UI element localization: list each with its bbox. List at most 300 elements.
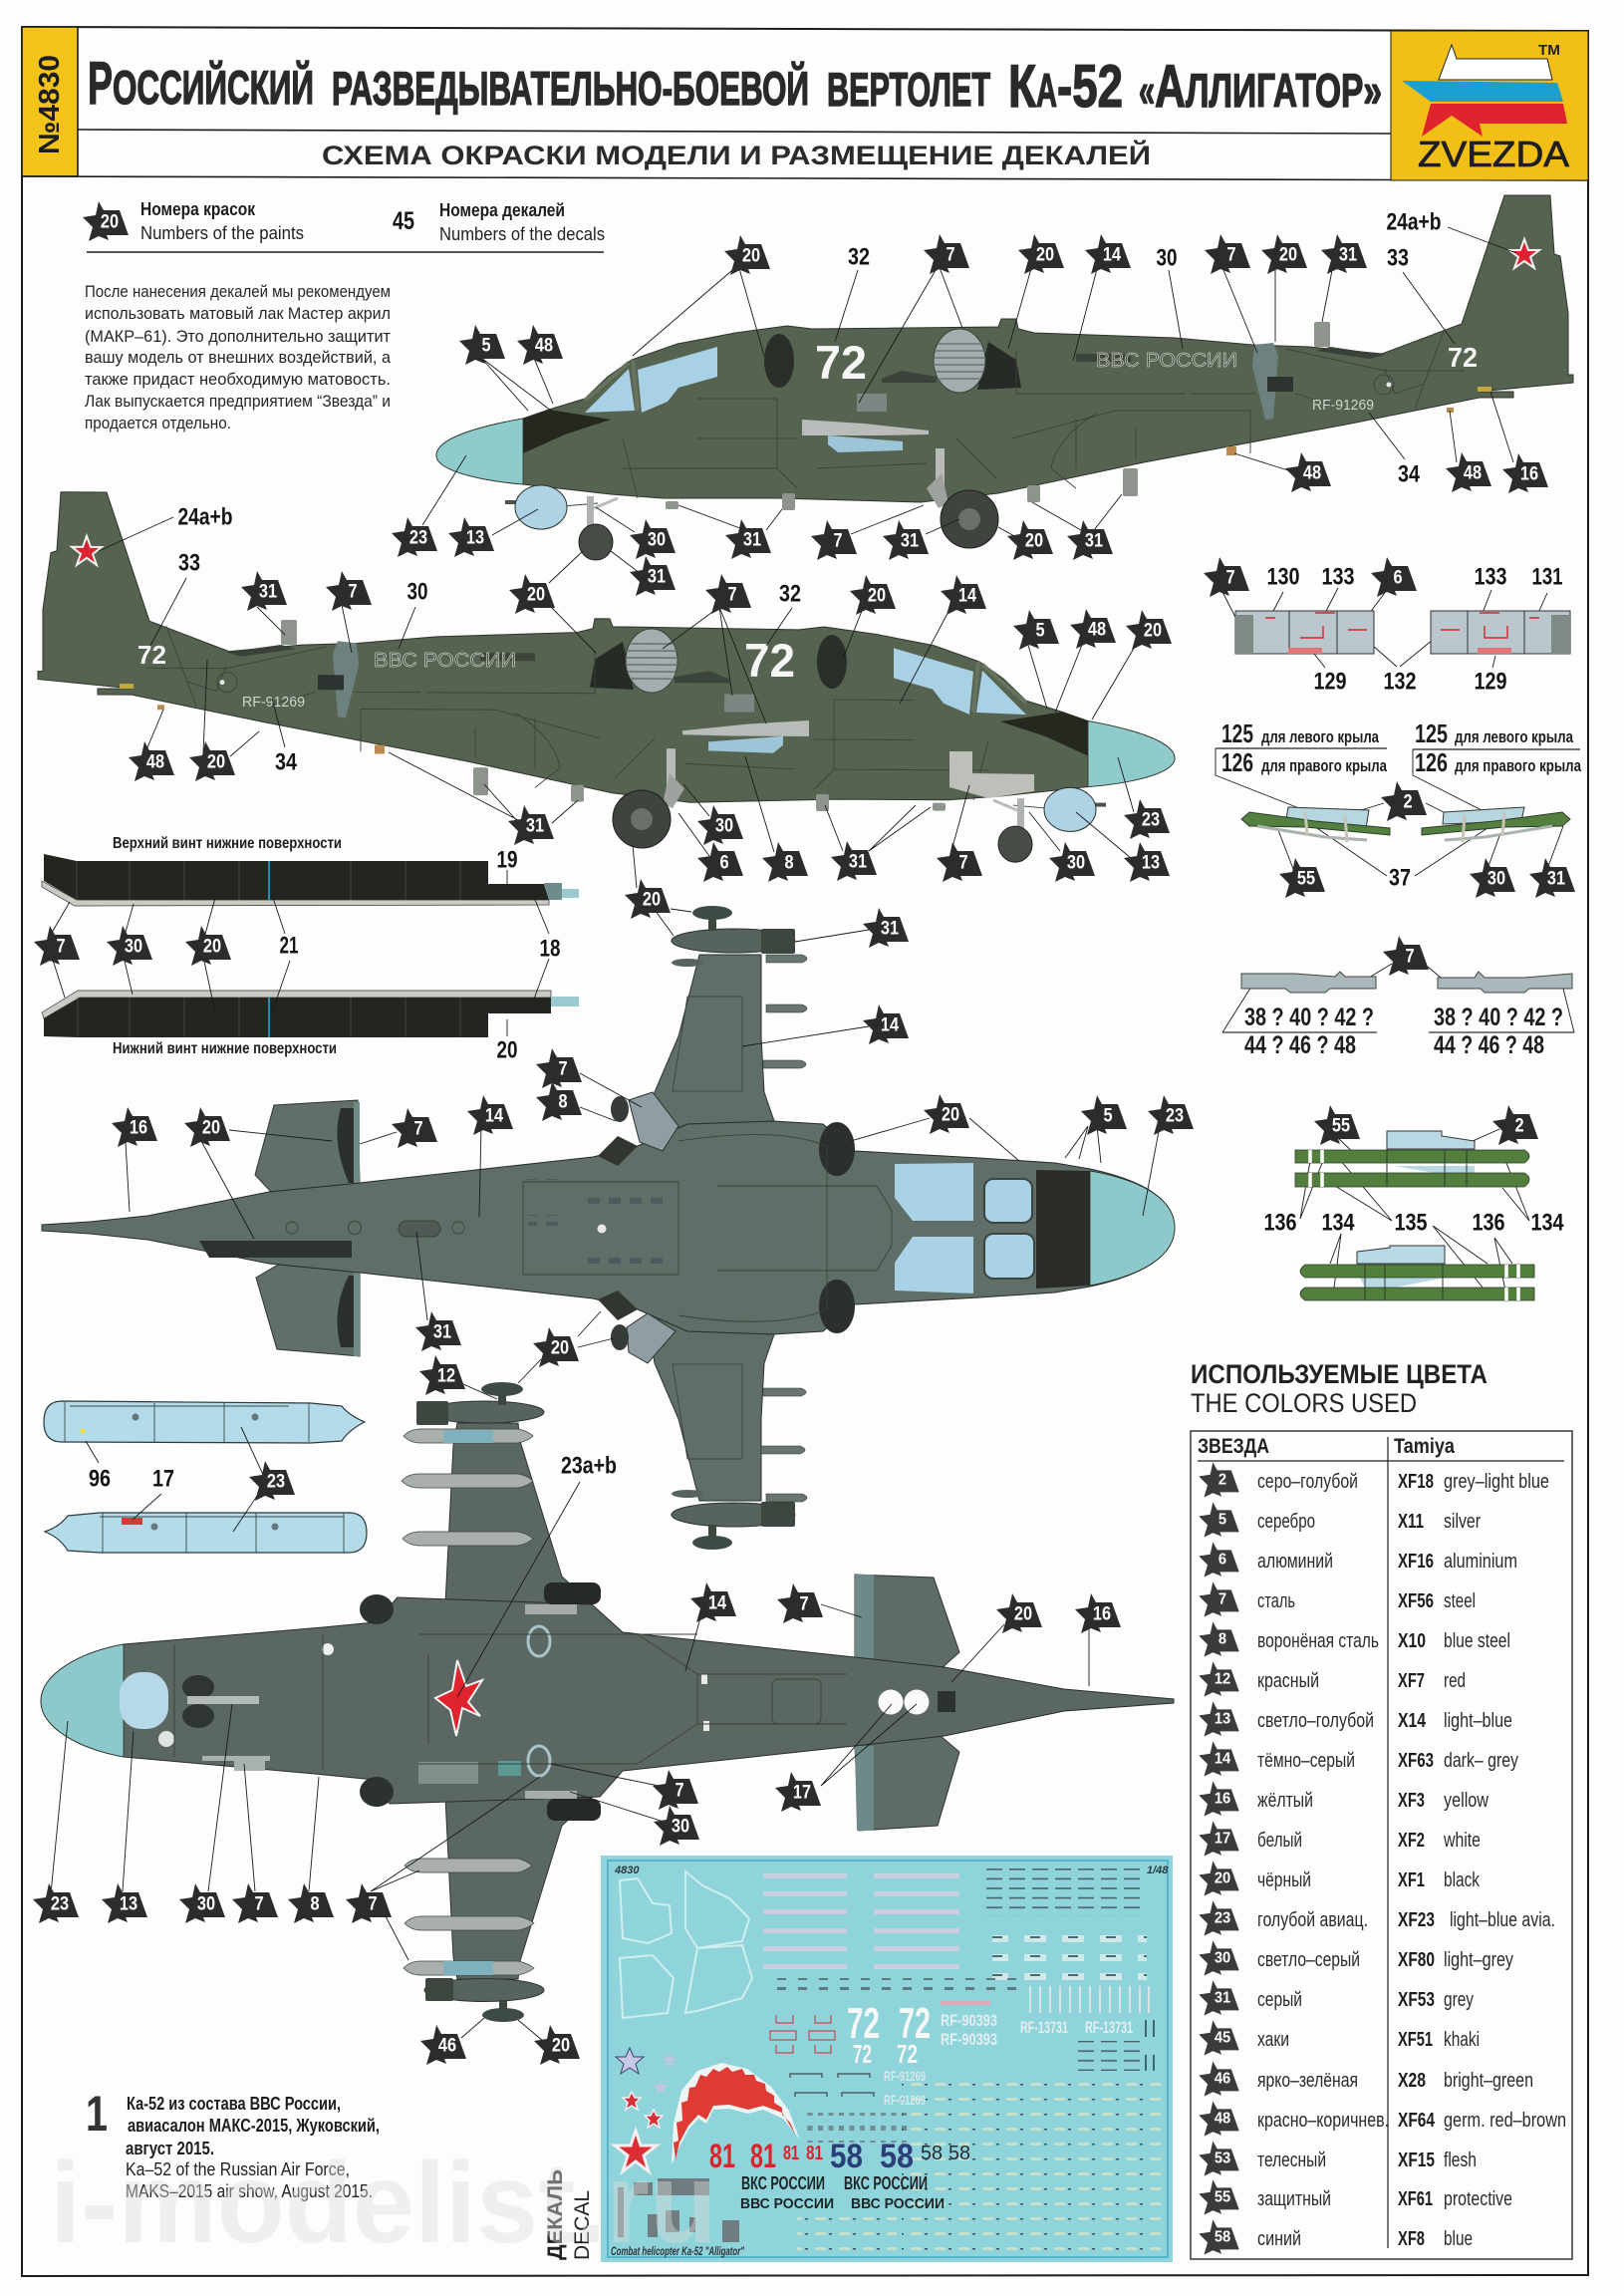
badge 30 (630, 519, 676, 559)
colors heading: THE COLORS USED (1191, 1388, 1417, 1418)
row 8: 8 (1218, 1630, 1227, 1648)
row 17: белый (1257, 1830, 1302, 1852)
badges and labels for containers: 133 (1321, 564, 1355, 590)
badge 48: 48 (535, 334, 553, 356)
wing side labels (1221, 718, 1581, 777)
row 13: 13 (1215, 1710, 1230, 1728)
variant text: Ка-52 из состава ВВС России, (127, 2094, 341, 2114)
badge 23 (1148, 1095, 1194, 1135)
badges and labels for containers: 129 (1313, 668, 1347, 696)
text block: varnish recommendation (85, 282, 392, 432)
badge 14 (690, 1582, 736, 1622)
variant number: 1 (86, 2086, 108, 2142)
wing tip pods and missiles (402, 1382, 544, 2022)
badge 48 (1070, 609, 1116, 649)
badge 23 (392, 517, 437, 557)
legend (83, 199, 605, 252)
badge 20 (1018, 234, 1064, 274)
launcher labels (1263, 1105, 1564, 1236)
badge 20: 20 (1279, 243, 1297, 265)
decal number labels: 23a+b (561, 1453, 617, 1479)
badges and labels for containers: 133 (1475, 564, 1506, 590)
badge 8: 8 (558, 1090, 568, 1112)
row 7: 7 (1218, 1590, 1226, 1608)
wing side labels: 126 (1415, 747, 1448, 777)
badge 7 (653, 1770, 698, 1810)
sheet caption: Combat helicopter Ka-52 "Alligator" (611, 2244, 744, 2258)
row 30: 30 (1215, 1949, 1230, 1967)
shark mouth decal (672, 2063, 799, 2164)
badge 2 (1492, 1105, 1538, 1145)
variant text: MAKS–2015 air show, August 2015. (126, 2181, 373, 2201)
sheet number and scale: 1/48 (1147, 1865, 1169, 1876)
row 16: жёлтый (1257, 1790, 1313, 1812)
badge 17 (775, 1772, 821, 1812)
legend paints text (140, 199, 304, 243)
text block: varnish recommendation: также придаст необходимую матовость. (85, 370, 391, 389)
row 30 (1199, 1940, 1513, 1976)
decal number labels: 21 (279, 933, 299, 959)
row 7 (1199, 1581, 1476, 1617)
row 8 (1199, 1621, 1510, 1657)
row 2: 2 (1218, 1471, 1226, 1489)
badge 8 (536, 1081, 582, 1121)
badge 7 (1205, 234, 1250, 274)
decal number labels (89, 209, 1441, 1493)
title (88, 50, 1382, 120)
badge 17: 17 (793, 1781, 811, 1803)
badge 20 (625, 879, 671, 919)
decal number labels: 32 (779, 580, 801, 608)
badge 31 (1067, 520, 1113, 560)
side view helicopter, left-facing: RF-91269 (1312, 397, 1374, 414)
watermark: i-modelist.ru (50, 2140, 717, 2267)
row 45: 45 (1215, 2029, 1231, 2047)
badges and labels for containers (1204, 557, 1562, 696)
sheet number and scale: 4830 (614, 1865, 640, 1876)
row 46 (1199, 2061, 1533, 2097)
legend decals text: Номера декалей (439, 200, 565, 220)
row 45: хаки (1257, 2029, 1289, 2051)
badge 23: 23 (267, 1470, 285, 1492)
badge 31 (863, 908, 909, 948)
red star insignia (435, 1660, 482, 1736)
badge 6: 6 (1393, 566, 1403, 588)
badge 55 (1314, 1105, 1360, 1145)
row 53: XF15 (1398, 2150, 1435, 2171)
lower launcher (1300, 1246, 1534, 1300)
badge 14: 14 (958, 584, 976, 606)
badge 13: 13 (1142, 851, 1160, 873)
badge 16 (1502, 453, 1548, 493)
badge 2: 2 (1514, 1114, 1524, 1136)
row 17 (1199, 1821, 1481, 1857)
left container (1235, 611, 1374, 654)
decal numbers: RF-13731 (1020, 2018, 1068, 2037)
left pylon assembly (1241, 807, 1390, 842)
text block: varnish recommendation: После нанесения декалей мы рекомендуем (85, 282, 391, 301)
side view helicopter, left-facing: ВВС РОССИИ (1096, 350, 1237, 372)
row 13: X14 (1398, 1710, 1427, 1732)
instrument decals block (618, 2178, 739, 2242)
decal number labels: 34 (275, 749, 298, 775)
row 55: protective (1444, 2188, 1512, 2210)
wing side labels: для правого крыла (1455, 756, 1581, 775)
badge 7: 7 (946, 243, 955, 265)
badge 7 (34, 926, 80, 966)
badge 20 (189, 741, 235, 781)
row 12: красный (1257, 1670, 1319, 1692)
right pylon assembly (1422, 807, 1570, 842)
row 48 (1199, 2101, 1566, 2137)
badge 7 (536, 1048, 582, 1088)
badge 30 (179, 1883, 225, 1923)
decal numbers: 81 (709, 2138, 735, 2175)
decal numbers: 72 (897, 2039, 918, 2069)
yellow strip with kit number: №4830 (34, 55, 66, 154)
badge 20: 20 (1144, 619, 1162, 641)
badge 30: 30 (715, 814, 733, 836)
badge 55 (1279, 858, 1325, 898)
decal numbers: RF-91269 (884, 2068, 926, 2084)
row 45: khaki (1444, 2029, 1480, 2051)
badge 14 (1085, 234, 1131, 274)
row 23: light–blue avia. (1450, 1909, 1555, 1931)
row 12: red (1444, 1670, 1466, 1692)
badge 20: 20 (527, 583, 545, 605)
row 6: 6 (1218, 1551, 1226, 1569)
badge 30 (697, 805, 743, 845)
badge 2 (1381, 781, 1427, 821)
row 14: XF63 (1398, 1750, 1434, 1772)
row 12: XF7 (1398, 1670, 1425, 1692)
row 12 (1199, 1661, 1466, 1697)
star decals (615, 2048, 677, 2171)
row 7: XF56 (1398, 1590, 1434, 1612)
row 46: 46 (1215, 2070, 1230, 2088)
badge 12: 12 (437, 1364, 455, 1386)
badge 23 (249, 1461, 295, 1501)
badge 16 (112, 1107, 157, 1147)
table header: ЗВЕЗДА (1198, 1435, 1269, 1458)
row 45 (1199, 2020, 1480, 2056)
row 30: светло–серый (1257, 1949, 1360, 1971)
row 23 (1199, 1900, 1555, 1936)
row 48: XF64 (1398, 2110, 1436, 2132)
badge 7 (777, 1583, 823, 1623)
badge 13 (1124, 842, 1170, 882)
decal number labels: 24a+b (177, 504, 233, 530)
decal side label (544, 2169, 594, 2260)
badge 20 (1261, 234, 1307, 274)
header (22, 27, 1588, 180)
row 58: синий (1257, 2228, 1301, 2250)
row 55: 55 (1215, 2188, 1231, 2206)
logo: TM (1538, 42, 1560, 59)
badge 20: 20 (1014, 1602, 1032, 1624)
top-down helicopter view (42, 906, 1175, 1550)
paint callout badges (33, 234, 1548, 2065)
title: А (1155, 53, 1186, 120)
row 48: germ. red–brown (1444, 2110, 1566, 2132)
badge 48: 48 (146, 750, 164, 772)
decal numbers: 72 (847, 1999, 880, 2048)
badge 31: 31 (743, 528, 761, 550)
badge 8: 8 (784, 851, 794, 873)
colors table (1191, 1431, 1572, 2259)
decal sheet (601, 1856, 1173, 2262)
decal numbers: 58 (948, 2143, 970, 2164)
badge 48: 48 (1303, 461, 1321, 483)
badge 7 (346, 1883, 392, 1923)
badge 48: 48 (1088, 618, 1106, 640)
badge 7: 7 (727, 583, 737, 605)
badge 7: 7 (1405, 945, 1415, 967)
badges and labels for containers: 129 (1475, 668, 1506, 696)
row 16: 16 (1215, 1790, 1230, 1808)
logo: ZVEZDA (1418, 134, 1569, 174)
badge 20 (534, 2025, 580, 2065)
badge 13 (102, 1883, 147, 1923)
decal number labels: 24a+b (1387, 209, 1441, 235)
row 5: 5 (1218, 1511, 1227, 1529)
leader lines (49, 227, 1574, 2041)
badge 8: 8 (310, 1892, 320, 1914)
row 14: dark– grey (1444, 1750, 1518, 1772)
badge 20: 20 (1036, 243, 1054, 265)
legend decals text: Numbers of the decals (439, 224, 605, 244)
badge 5 (1013, 610, 1059, 650)
side view helicopter, right-facing: ВВС РОССИИ (374, 650, 516, 672)
row 46: bright–green (1444, 2070, 1533, 2092)
badge 8 (762, 842, 808, 882)
detail: missile launchers (1263, 1105, 1564, 1300)
decal number labels: 32 (848, 243, 870, 271)
row 16 (1199, 1781, 1489, 1817)
variant text: авиасалон МАКС-2015, Жуковский, (128, 2116, 380, 2136)
badge 30: 30 (1488, 867, 1505, 889)
variant text: Ka–52 of the Russian Air Force, (126, 2159, 350, 2179)
rotor blades (42, 835, 579, 1057)
text block: varnish recommendation: Лак выпускается предприятием “Звезда” и (85, 392, 391, 411)
row 5: X11 (1398, 1511, 1424, 1533)
badge 20: 20 (552, 2034, 570, 2056)
decal numbers: 58 (921, 2143, 943, 2164)
row 58: 58 (1215, 2228, 1231, 2246)
badge 12 (419, 1355, 465, 1395)
badge 14 (863, 1004, 909, 1044)
badge 20 (924, 1094, 969, 1134)
badge 31: 31 (849, 850, 867, 872)
launcher labels: 136 (1263, 1210, 1297, 1236)
badge 20: 20 (551, 1336, 569, 1358)
badge 30 (1049, 842, 1095, 882)
badge 20: 20 (942, 1103, 959, 1125)
row 48: красно–коричнев. (1257, 2110, 1389, 2132)
row 8: blue steel (1444, 1630, 1510, 1652)
side view helicopter, left-facing: 72 (1448, 342, 1478, 373)
badge 55: 55 (1332, 1114, 1350, 1136)
header rules (22, 130, 1588, 180)
badge 23: 23 (1166, 1104, 1184, 1126)
badge 23 (1124, 799, 1170, 839)
badge 31: 31 (1085, 529, 1103, 551)
row 55 (1199, 2179, 1512, 2215)
badge 30 (1470, 858, 1515, 898)
badge 16: 16 (1093, 1602, 1111, 1624)
badge 7: 7 (56, 935, 66, 957)
badge 7 (811, 520, 857, 560)
decal options text: 38 ? 40 ? 42 ? (1434, 1004, 1563, 1031)
decal number example: 45 (393, 207, 414, 235)
badges and labels for containers: 130 (1267, 564, 1299, 590)
badge 30: 30 (1067, 851, 1085, 873)
row 2: grey–light blue (1444, 1471, 1549, 1493)
side view helicopter, right-facing: 72 (744, 634, 795, 687)
decal number labels: 19 (496, 847, 518, 873)
badge 13: 13 (466, 526, 484, 548)
title: -52 (1057, 53, 1123, 120)
logo (1391, 31, 1588, 180)
row 13: light–blue (1444, 1710, 1512, 1732)
row 14 (1199, 1741, 1518, 1777)
decal numbers (709, 1999, 1133, 2212)
title: ОССИЙСКИЙ (113, 61, 314, 114)
row 13 (1199, 1701, 1512, 1737)
badge 14: 14 (881, 1013, 899, 1035)
upper rotor blade (42, 854, 579, 906)
badge 31: 31 (648, 565, 666, 587)
badge 31: 31 (433, 1320, 451, 1342)
row 5 (1199, 1502, 1481, 1538)
badge 31 (1321, 234, 1367, 274)
badge 14: 14 (708, 1591, 726, 1613)
badge 8 (288, 1883, 334, 1923)
badge 7 (232, 1883, 278, 1923)
row 53: flesh (1444, 2150, 1477, 2171)
badge 31: 31 (901, 529, 919, 551)
badge 46 (420, 2025, 466, 2065)
badge 7 (326, 571, 372, 611)
badge 13 (448, 517, 494, 557)
badge 20 (724, 235, 770, 275)
badge 20 (533, 1327, 579, 1367)
badge 13: 13 (120, 1892, 137, 1914)
title: К (1008, 53, 1036, 120)
badge 31: 31 (1339, 243, 1357, 265)
underside helicopter view (41, 1382, 1174, 2022)
upper launcher (1295, 1131, 1529, 1187)
decal options text: 44 ? 46 ? 48 (1434, 1031, 1544, 1059)
colors heading (1191, 1359, 1488, 1418)
badge 20: 20 (868, 584, 886, 606)
yellow strip with kit number (22, 27, 78, 176)
text block: varnish recommendation: использовать матовый лак Мастер акрил (85, 304, 391, 323)
pale camouflage outlines (620, 1871, 752, 2018)
stripe rows (763, 1873, 959, 1969)
badge 20 (185, 926, 231, 966)
side view helicopter, right-facing: 72 (137, 640, 166, 670)
decal numbers: RF-91269 (884, 2092, 926, 2108)
badge 23: 23 (51, 1892, 69, 1914)
wing side labels: для левого крыла (1455, 727, 1573, 746)
badge 31 (415, 1311, 461, 1351)
decal number labels: 34 (1398, 460, 1421, 488)
row 53: 53 (1215, 2150, 1230, 2167)
badge 5: 5 (481, 334, 491, 356)
badge 30: 30 (197, 1892, 215, 1914)
row 53: телесный (1257, 2150, 1326, 2171)
row 23: голубой авиац. (1257, 1909, 1368, 1931)
row 58: blue (1444, 2228, 1473, 2250)
decal numbers: ВВС РОССИИ (740, 2195, 834, 2212)
row 8: воронёная сталь (1257, 1630, 1379, 1652)
badge 31: 31 (881, 917, 899, 939)
variant text (126, 2094, 380, 2201)
badge 5 (1081, 1095, 1127, 1135)
decal number labels: 33 (1387, 245, 1409, 271)
badge 31: 31 (259, 580, 277, 602)
badge 31 (1529, 858, 1575, 898)
decal numbers: RF-90393 (941, 2011, 997, 2030)
row 20: 20 (1215, 1869, 1230, 1887)
badge 16 (1075, 1593, 1121, 1633)
badge 20: 20 (1025, 529, 1043, 551)
row 7: steel (1444, 1590, 1476, 1612)
decal numbers: ВКС РОССИИ (741, 2173, 825, 2193)
row 53 (1199, 2141, 1477, 2176)
pylon badges and labels: 37 (1389, 865, 1411, 891)
wing tip pods and missiles (672, 906, 807, 1550)
badge: paint number example: 20 (101, 210, 119, 232)
side view helicopter, left-facing (436, 195, 1573, 560)
lower tank (45, 1513, 367, 1553)
row 17: 17 (1215, 1830, 1230, 1848)
row 16: XF3 (1398, 1790, 1425, 1812)
row 17: XF2 (1398, 1830, 1425, 1852)
text block: varnish recommendation: вашу модель от внешних воздействий, а (85, 348, 392, 367)
title: Р (88, 50, 113, 117)
title: ЛЛИГАТОР» (1186, 64, 1382, 117)
badge 6 (1371, 557, 1417, 597)
pylon badges and labels (1279, 781, 1575, 898)
row 46: ярко–зелёная (1257, 2070, 1358, 2092)
decal numbers: 81 (750, 2138, 776, 2175)
row 16: yellow (1444, 1790, 1489, 1812)
decal number labels: 30 (406, 578, 428, 606)
badge 31 (241, 571, 287, 611)
row 5: silver (1444, 1511, 1481, 1533)
title: А (1036, 64, 1057, 117)
detail: pod panels with decal options (1222, 936, 1574, 1059)
badge 20 (509, 574, 555, 614)
variant text: август 2015. (126, 2139, 214, 2158)
badge 7 (705, 574, 751, 614)
side view helicopter, left-facing: 72 (815, 336, 867, 389)
badge 20 (184, 1107, 230, 1147)
badge 5: 5 (1103, 1104, 1113, 1126)
row 20: black (1444, 1869, 1481, 1891)
launcher labels: 136 (1473, 1210, 1504, 1236)
decal number labels: 18 (540, 935, 560, 963)
upper tank (44, 1401, 365, 1443)
sheet number and scale (614, 1865, 1169, 1876)
badge 5 (459, 325, 505, 365)
badge 16: 16 (1520, 462, 1538, 484)
table header: Tamiya (1394, 1435, 1455, 1458)
title: ВЕРТОЛЕТ (827, 63, 990, 116)
red brackets (770, 2015, 835, 2053)
